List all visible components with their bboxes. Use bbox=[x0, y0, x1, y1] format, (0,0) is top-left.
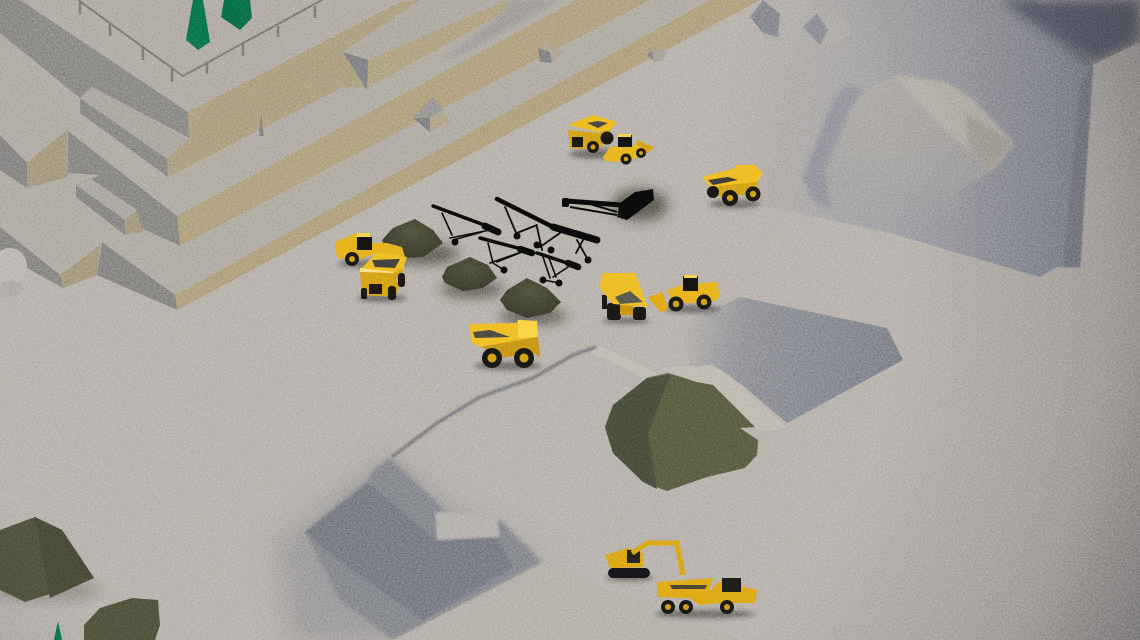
vehicle shadows bbox=[338, 149, 761, 618]
dump truck top bbox=[568, 115, 617, 153]
pit lower left bbox=[275, 455, 740, 640]
lit ridge edges bbox=[590, 346, 787, 432]
conveyor 2 bbox=[497, 199, 597, 263]
conveyor 4 bbox=[537, 253, 578, 286]
pile: centre mound 2 bbox=[442, 257, 497, 291]
terrace mid block bbox=[0, 130, 180, 246]
pile: bottom mound small bbox=[84, 598, 160, 640]
dump truck left bbox=[360, 252, 407, 300]
lower step bbox=[76, 177, 143, 235]
ramp block on upper terrace bbox=[343, 0, 507, 90]
small rocks on terraces bbox=[259, 40, 667, 136]
excavator bbox=[605, 543, 683, 578]
pile: large olive mound bbox=[605, 373, 758, 491]
top right dark corner bbox=[1000, 0, 1140, 65]
green cone trees bbox=[186, 0, 252, 50]
panel: terraces top-left bbox=[0, 0, 760, 310]
ridge shadow line bbox=[392, 347, 596, 457]
boulders top bbox=[750, 0, 852, 45]
terrace second tan band bbox=[177, 0, 650, 246]
conveyors black bbox=[433, 199, 597, 286]
terrace tan face upper bbox=[167, 0, 420, 177]
terrace third tan band bbox=[175, 0, 760, 310]
ledge soft shadow bbox=[437, 0, 560, 63]
terrace grey ledges bbox=[0, 0, 760, 310]
icon: small tree bottom-left bbox=[54, 621, 62, 640]
conveyor 1 bbox=[433, 206, 498, 245]
pile: bottom-left mound bbox=[0, 517, 100, 602]
pile: centre mound 1 bbox=[382, 219, 443, 258]
terrace left face upper bbox=[0, 0, 189, 138]
railing bbox=[78, 0, 322, 82]
pile: centre mound shadows bbox=[391, 189, 668, 324]
conveyor: screener plant bbox=[562, 189, 654, 220]
wheel loader left bbox=[335, 233, 405, 266]
dump truck lower-centre bbox=[470, 320, 540, 368]
pit outer shadow bbox=[275, 455, 545, 640]
lit plateau lip bbox=[393, 563, 740, 640]
wheel loader centre-right bbox=[648, 275, 720, 312]
light block bbox=[435, 512, 500, 540]
step block upper bbox=[80, 87, 188, 177]
wheel loader top bbox=[603, 134, 654, 164]
right wall bbox=[1063, 42, 1140, 300]
large grey mound right bbox=[803, 75, 1013, 235]
pile: centre mound 3 bbox=[500, 278, 561, 318]
dump truck centre-right bbox=[599, 273, 648, 320]
pit shadow wall bbox=[305, 458, 542, 640]
pit floor bbox=[305, 483, 513, 620]
dump truck right bbox=[702, 165, 763, 206]
pit right of centre bbox=[680, 297, 903, 423]
boulders left bbox=[0, 248, 27, 297]
terrace lower faces bbox=[0, 227, 177, 310]
conveyor 3 bbox=[480, 238, 532, 273]
shaded basin right bbox=[700, 0, 1093, 277]
articulated hauler bbox=[657, 578, 757, 614]
